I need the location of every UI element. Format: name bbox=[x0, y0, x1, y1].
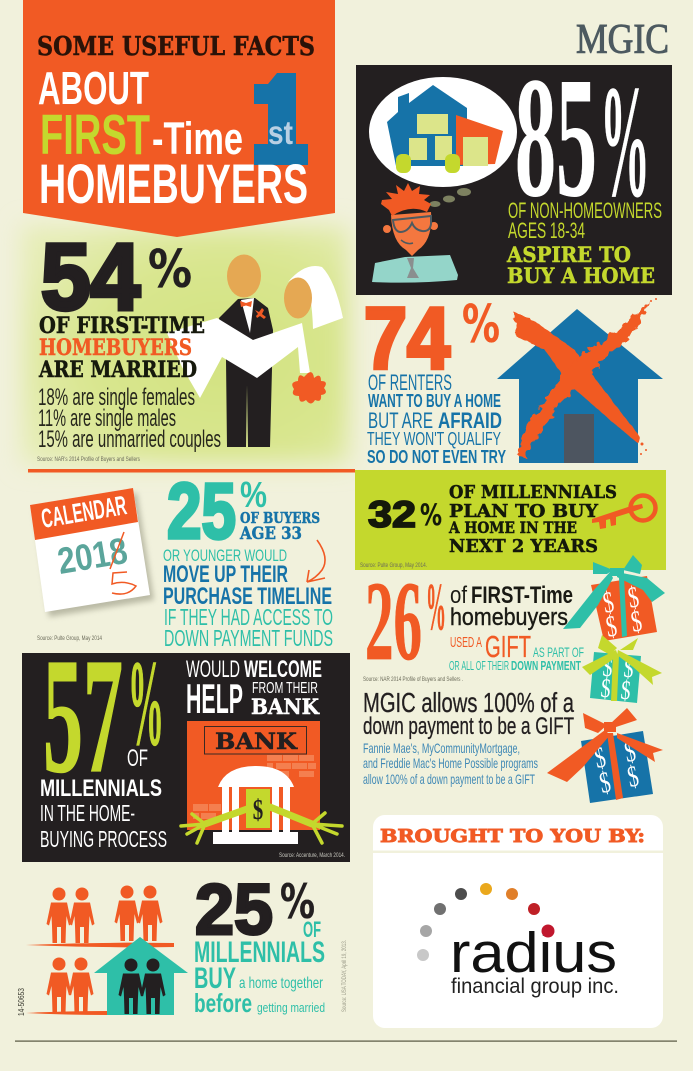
text block: aspire to buy a home: BUY A HOME bbox=[507, 263, 655, 288]
icon: teal gift: $ bbox=[602, 653, 614, 683]
label: st: st bbox=[268, 114, 293, 151]
icon: big number one bbox=[254, 73, 308, 165]
text block: of first-time homebuyers bbox=[450, 582, 573, 631]
stat: 85 percent: 85 bbox=[515, 43, 597, 233]
arrow: hand-drawn orange bbox=[307, 540, 325, 582]
text block: plan to buy bbox=[448, 482, 617, 557]
stat: 74 percent: 74 bbox=[364, 290, 450, 387]
text block: used a gift bbox=[449, 629, 584, 673]
title text: HOMEBUYERS bbox=[39, 152, 308, 215]
text block: purchase timeline: PURCHASE TIMELINE bbox=[163, 583, 332, 610]
text block: renters afraid to qualify: THEY WON'T QUALIFY bbox=[367, 428, 501, 449]
heading: of first-time homebuyers are married: ARE MARRIED bbox=[38, 357, 197, 383]
text block: MGIC allows gift: MGIC allows 100% of a bbox=[363, 687, 574, 718]
divider line under married panel bbox=[28, 469, 355, 472]
stat: 32 percent: % bbox=[420, 498, 442, 532]
text block: used a gift: OR ALL OF THEIR bbox=[449, 658, 509, 673]
text block: millennials in process: MILLENNIALS bbox=[40, 775, 162, 802]
icon: groom carrying bride bbox=[167, 254, 343, 447]
text block: plan to buy: A HOME IN THE bbox=[448, 518, 577, 537]
text block: millennials buy before getting married bbox=[194, 917, 325, 1018]
icon: calendar bbox=[30, 488, 154, 617]
text block: millennials in process: IN THE HOME- bbox=[40, 800, 135, 826]
text block: would welcome help from their bank: FROM THEIR bbox=[252, 680, 318, 697]
text block: purchase timeline bbox=[163, 546, 333, 651]
icon: orange gift: $ bbox=[600, 585, 616, 620]
text block: renters afraid to qualify: SO DO NOT EVEN TRY bbox=[367, 446, 506, 467]
stat: 32 percent: 32 bbox=[368, 494, 416, 535]
section: 74% of renters bbox=[364, 290, 663, 467]
text: of buyers age 33: AGE 33 bbox=[239, 524, 302, 544]
title banner bbox=[23, 0, 335, 237]
icon: calendar: 2018 bbox=[55, 530, 130, 582]
text block: purchase timeline: IF THEY HAD ACCESS TO bbox=[164, 604, 333, 630]
title text: -Time bbox=[152, 113, 243, 164]
text block: of first-time homebuyers: of bbox=[450, 582, 467, 609]
title text: FIRST bbox=[40, 103, 150, 167]
section: 25% of buyers age 33 bbox=[37, 466, 333, 651]
icon: orange gift: $ bbox=[603, 609, 619, 644]
text block: aspire to buy a home: ASPIRE TO bbox=[506, 242, 631, 267]
text block: plan to buy: PLAN TO BUY bbox=[449, 501, 599, 522]
text block: other buyer shares: 11% are single males bbox=[38, 405, 176, 432]
icon: blue gift: $ bbox=[596, 765, 614, 800]
text block: aspire to buy a home bbox=[506, 198, 662, 288]
text block: millennials in process bbox=[40, 745, 167, 852]
source note: Source: Pulte Group, May 2014 bbox=[37, 636, 103, 642]
stat: 25 percent: % bbox=[280, 875, 315, 930]
text block: of first-time homebuyers: homebuyers bbox=[450, 604, 568, 631]
icon: blue gift bbox=[547, 708, 663, 803]
text block: MGIC allows gift bbox=[363, 687, 574, 740]
icon: teal gift: $ bbox=[623, 654, 635, 684]
logo: MGIC: MGIC bbox=[576, 17, 669, 63]
icon: teal gift bbox=[582, 635, 662, 706]
title text: SOME USEFUL FACTS bbox=[37, 32, 315, 62]
text block: plan to buy: NEXT 2 YEARS bbox=[449, 536, 598, 557]
text: of buyers age 33 bbox=[239, 509, 320, 544]
logo: radius financial group: financial group inc. bbox=[451, 975, 619, 998]
source note: vertical: Source: USA TODAY, April 19, 2013. bbox=[342, 940, 348, 1012]
text block: millennials buy before getting married: OF bbox=[303, 917, 321, 942]
text block: other buyer shares: 15% are unmarried couples bbox=[38, 426, 221, 453]
text block: would welcome help from their bank: WELCOME bbox=[244, 656, 322, 683]
panel: 54% married bbox=[22, 224, 348, 464]
text block: would welcome help from their bank: BANK bbox=[251, 694, 320, 719]
heading: of first-time homebuyers are married: HOMEBUYERS bbox=[39, 335, 192, 361]
stat: 54 percent: % bbox=[148, 240, 192, 300]
text block: eligible programs: Fannie Mae's, MyCommunityMortgage, bbox=[363, 740, 520, 756]
text block: renters afraid to qualify: AFRAID bbox=[438, 408, 502, 433]
text block: renters afraid to qualify bbox=[367, 370, 506, 467]
text block: millennials buy before getting married: MILLENNIALS bbox=[194, 936, 325, 969]
logo: radius financial group: radius bbox=[450, 921, 617, 985]
text block: used a gift: AS PART OF bbox=[533, 644, 584, 660]
text block: millennials in process: BUYING PROCESS bbox=[40, 826, 167, 852]
text block: purchase timeline: DOWN PAYMENT FUNDS bbox=[164, 625, 333, 651]
icon: calendar: CALENDAR bbox=[39, 490, 129, 534]
text block: renters afraid to qualify: OF RENTERS bbox=[368, 370, 452, 395]
text block: would welcome help from their bank bbox=[186, 656, 322, 722]
icon: thought bubble with house and moving truck bbox=[369, 77, 517, 207]
icon: blue gift: $ bbox=[621, 734, 639, 769]
text block: renters afraid to qualify: WANT TO BUY A HOME bbox=[368, 390, 501, 411]
text block: eligible programs: allow 100% of a down payment to be a GIFT bbox=[363, 771, 535, 787]
title text bbox=[37, 32, 315, 215]
icon: bank building with reaching arms: $ bbox=[253, 795, 263, 826]
text block: eligible programs: and Freddie Mac's Home Possible programs bbox=[363, 755, 538, 771]
icon: blue gift: $ bbox=[591, 740, 609, 775]
icon: teal gift: $ bbox=[600, 674, 612, 704]
section: 25% of millennials buy together bbox=[17, 871, 348, 1018]
source note: Source: Accenture, March 2014. bbox=[279, 853, 345, 859]
job code: vertical: 14-50653 bbox=[17, 988, 26, 1016]
text block: millennials buy before getting married: getting married bbox=[257, 1001, 325, 1015]
icon: orange gift bbox=[563, 555, 665, 644]
stat: 25 percent: 25 bbox=[195, 871, 273, 950]
text block: of first-time homebuyers: FIRST-Time bbox=[471, 582, 573, 609]
text block: renters afraid to qualify: BUT ARE bbox=[368, 408, 433, 433]
text block: millennials in process: OF bbox=[127, 745, 148, 772]
text block: plan to buy: OF MILLENNIALS bbox=[449, 482, 617, 503]
text block: used a gift: DOWN PAYMENT bbox=[511, 658, 581, 673]
text block: would welcome help from their bank: HELP bbox=[186, 675, 243, 722]
stat: 74 percent: % bbox=[462, 295, 500, 355]
text block: used a gift: GIFT bbox=[485, 629, 531, 664]
icon: orange gift: $ bbox=[628, 604, 644, 639]
title text: ABOUT bbox=[38, 62, 149, 114]
panel: 57% of millennials bbox=[22, 624, 350, 862]
icon: bank building with reaching arms: BANK bbox=[215, 729, 298, 755]
panel: brought to you by bbox=[362, 815, 673, 1028]
section: 26% used a gift: % bbox=[426, 570, 446, 644]
text: of buyers age 33: OF BUYERS bbox=[240, 509, 320, 527]
heading: of first-time homebuyers are married: OF FIRST-TIME bbox=[39, 313, 205, 339]
icon: blue gift: $ bbox=[624, 759, 642, 794]
source note: Source: NAR 2014 Profile of Buyers and Sellers . bbox=[363, 677, 463, 683]
icon: orange gift: $ bbox=[625, 580, 641, 615]
logo: radius financial group bbox=[417, 883, 619, 998]
stat: 54 percent bbox=[41, 224, 192, 329]
stat: 54 percent: 54 bbox=[41, 224, 140, 329]
heading: brought to you by: BROUGHT TO YOU BY: bbox=[380, 826, 645, 847]
text block: millennials buy before getting married: a home together bbox=[239, 975, 323, 992]
source note: Source: Pulte Group, May 2014. bbox=[360, 563, 427, 569]
icon: man with glasses bbox=[372, 183, 458, 283]
icon: teal gift: $ bbox=[620, 676, 632, 706]
stat: 26 percent: 26 bbox=[365, 559, 422, 684]
panel: 57% of millennials: % bbox=[128, 636, 164, 771]
text block: other buyer shares bbox=[38, 384, 221, 453]
panel: 85% aspire to buy bbox=[356, 43, 672, 295]
icon: bank building with reaching arms bbox=[181, 721, 342, 844]
text block: millennials buy before getting married: before bbox=[194, 988, 252, 1018]
text block: would welcome help from their bank: WOULD bbox=[186, 656, 240, 683]
stat: 57 percent: 57 bbox=[43, 624, 123, 807]
text block: used a gift: USED A bbox=[450, 634, 482, 651]
stat: 25 percent bbox=[195, 871, 315, 950]
stat: 25 percent: % bbox=[240, 474, 267, 515]
source note: Source: NAR's 2014 Profile of Buyers and Sellers bbox=[37, 457, 140, 463]
text block: eligible programs bbox=[363, 740, 538, 787]
icon: couples and house bbox=[26, 886, 188, 1015]
stat: 32 percent bbox=[368, 494, 442, 535]
text block: other buyer shares: 18% are single females bbox=[38, 384, 195, 411]
text block: millennials buy before getting married: BUY bbox=[194, 962, 236, 995]
text block: purchase timeline: OR YOUNGER WOULD bbox=[163, 546, 287, 565]
panel: 32% of millennials bbox=[355, 470, 666, 570]
section: 26% used a gift bbox=[363, 555, 665, 803]
icon: house crossed out bbox=[497, 298, 663, 463]
icon: key bbox=[592, 496, 656, 529]
text block: MGIC allows gift: down payment to be a GIFT bbox=[363, 713, 574, 740]
text block: purchase timeline: MOVE UP THEIR bbox=[163, 561, 288, 588]
text block: aspire to buy a home: AGES 18-34 bbox=[508, 218, 585, 243]
stat: 25 percent: 25 bbox=[167, 466, 236, 555]
heading: of first-time homebuyers are married bbox=[38, 313, 205, 383]
